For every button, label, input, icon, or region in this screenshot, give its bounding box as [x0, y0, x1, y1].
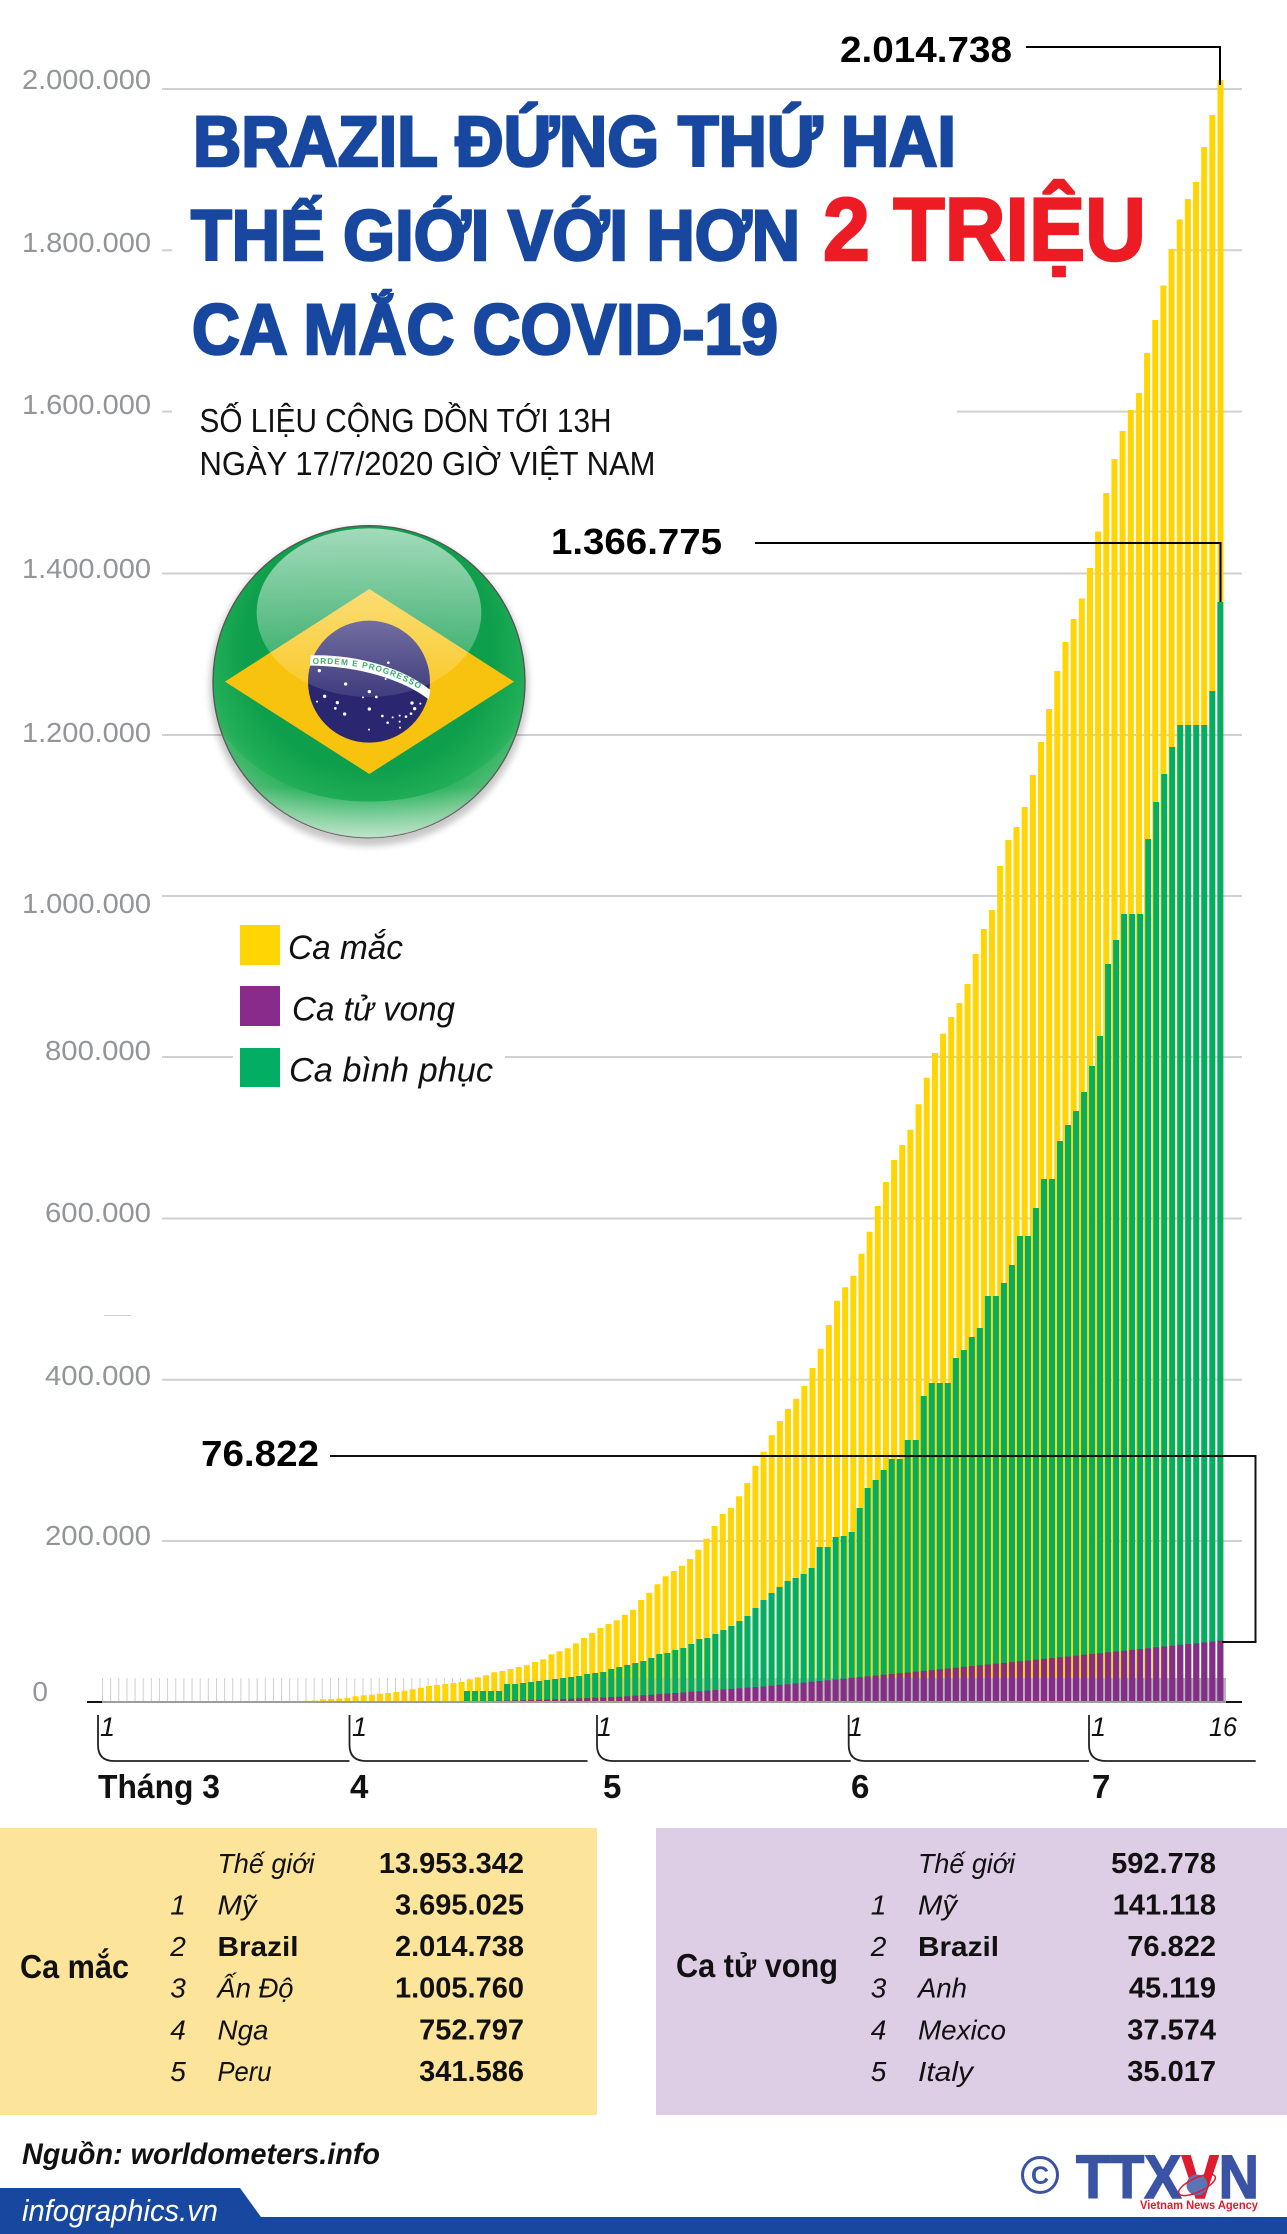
panel: ca tử vong ranking: 45.119: [1129, 1972, 1216, 2004]
panel: ca mắc ranking: Peru: [218, 2056, 272, 2087]
gridlines: [104, 89, 1242, 1541]
title: THẾ GIỚI VỚI HƠN: [191, 197, 800, 276]
callout: recovered: 1.366.775: [551, 521, 722, 562]
title: [191, 103, 1146, 370]
panel: ca mắc ranking: 3: [170, 1972, 186, 2004]
source: Nguồn: worldometers.info: [22, 2138, 380, 2171]
y-axis labels: 1.000.000: [22, 888, 151, 919]
panel: ca tử vong ranking: 5: [871, 2056, 887, 2087]
callout: deaths: 76.822: [201, 1433, 319, 1474]
y-axis labels: 1.800.000: [22, 227, 151, 258]
panel: ca mắc ranking: Nga: [218, 2014, 268, 2046]
legend: Ca bình phục: [289, 1052, 493, 1090]
panel: ca mắc ranking: 341.586: [419, 2056, 524, 2088]
y-axis labels: 800.000: [45, 1035, 151, 1066]
icon: copyright: [1022, 2158, 1058, 2192]
month brackets: 1: [597, 1712, 612, 1742]
panel: ca tử vong ranking: 592.778: [1111, 1848, 1216, 1880]
y-axis labels: 1.400.000: [22, 553, 151, 584]
panel: ca tử vong ranking: Mỹ: [918, 1890, 959, 1920]
callout: deaths: [201, 1433, 1256, 1642]
panel: ca tử vong ranking: [656, 1828, 1287, 2115]
y-axis labels: 200.000: [45, 1520, 151, 1551]
y-axis labels: [22, 64, 151, 1707]
panel: ca tử vong ranking: 1: [871, 1890, 886, 1920]
icon: Brazil flag globe: [206, 524, 532, 850]
icon: copyright: C: [1031, 2162, 1049, 2190]
month brackets: 5: [603, 1768, 621, 1805]
y-axis labels: 600.000: [45, 1197, 151, 1228]
callout: total cases: [840, 29, 1220, 85]
series: ca tử vong (purple): [464, 1641, 1223, 1702]
month brackets: Tháng 3: [98, 1768, 220, 1805]
panel: ca mắc ranking: 2: [169, 1931, 186, 1962]
month brackets: 1: [100, 1712, 115, 1742]
panel: ca mắc ranking: 4: [170, 2014, 186, 2046]
y-axis labels: 400.000: [45, 1360, 151, 1391]
footer band: [0, 2188, 1287, 2234]
y-axis labels: 1.600.000: [22, 389, 151, 420]
panel: ca mắc ranking: Mỹ: [218, 1890, 259, 1920]
panel: ca tử vong ranking: Italy: [918, 2056, 975, 2087]
panel: ca tử vong ranking: Mexico: [918, 2014, 1006, 2046]
panel: ca tử vong ranking: 141.118: [1113, 1890, 1216, 1922]
panel: ca mắc ranking: 752.797: [419, 2014, 524, 2046]
panel: ca tử vong ranking: Ca tử vong: [676, 1947, 838, 1984]
y-axis labels: 0: [32, 1676, 48, 1707]
month brackets: 1: [848, 1712, 863, 1742]
panel: ca tử vong ranking: 37.574: [1127, 2014, 1216, 2046]
callout: recovered: [551, 521, 1220, 602]
logo: TTXVN: Vietnam News Agency: [1140, 2198, 1258, 2212]
series: ca mắc (yellow): [263, 80, 1224, 1702]
panel: ca tử vong ranking: Thế giới: [918, 1848, 1016, 1879]
footer band: infographics.vn: [22, 2193, 218, 2228]
panel: ca mắc ranking: Ấn Độ: [216, 1972, 294, 2004]
legend: Ca tử vong: [292, 990, 455, 1028]
panel: ca tử vong ranking: 4: [871, 2014, 886, 2046]
month brackets: 16: [1209, 1712, 1238, 1742]
panel: ca tử vong ranking: 35.017: [1127, 2056, 1216, 2088]
title: CA MẮC COVID-19: [192, 290, 778, 370]
month brackets: 4: [350, 1768, 369, 1805]
bar chart: [87, 80, 1242, 1703]
callout: total cases: 2.014.738: [840, 29, 1012, 70]
panel: ca tử vong ranking: Anh: [916, 1972, 967, 2004]
panel: ca mắc ranking: Brazil: [218, 1931, 298, 1962]
y-axis labels: 1.200.000: [22, 717, 151, 748]
panel: ca mắc ranking: Ca mắc: [20, 1948, 129, 1985]
legend: [240, 925, 493, 1090]
panel: ca tử vong ranking: 2: [870, 1931, 887, 1962]
x-axis baseline: [87, 1701, 1242, 1703]
y-axis labels: 2.000.000: [22, 64, 151, 95]
panel: ca mắc ranking: Thế giới: [218, 1848, 315, 1879]
subtitle: [200, 401, 656, 482]
panel: ca tử vong ranking: Brazil: [918, 1931, 999, 1962]
month brackets: 1: [1091, 1712, 1106, 1742]
panel: ca tử vong ranking: 3: [871, 1972, 887, 2004]
title: 2 TRIỆU: [823, 179, 1146, 279]
series: ca bình phục (green): [464, 602, 1223, 1702]
legend: Ca mắc: [288, 929, 403, 967]
subtitle: NGÀY 17/7/2020 GIỜ VIỆT NAM: [200, 445, 656, 482]
panel: ca mắc ranking: [0, 1828, 597, 2115]
subtitle: SỐ LIỆU CỘNG DỒN TỚI 13H: [200, 401, 612, 439]
icon: Brazil flag globe: ORDEM E PROGRESSO: [312, 658, 421, 688]
panel: ca mắc ranking: 2.014.738: [395, 1931, 524, 1963]
month brackets: [98, 1712, 1256, 1805]
panel: ca mắc ranking: 1.005.760: [395, 1972, 524, 2004]
panel: ca mắc ranking: 3.695.025: [395, 1890, 524, 1922]
title: BRAZIL ĐỨNG THỨ HAI: [193, 103, 956, 182]
month brackets: 7: [1092, 1768, 1110, 1805]
panel: ca tử vong ranking: 76.822: [1127, 1931, 1216, 1963]
panel: ca mắc ranking: 13.953.342: [379, 1848, 524, 1880]
month brackets: 1: [352, 1712, 367, 1742]
panel: ca mắc ranking: 5: [170, 2056, 186, 2087]
month brackets: 6: [851, 1768, 869, 1805]
panel: ca mắc ranking: 1: [170, 1890, 186, 1920]
logo: TTXVN: TTXVN: [1076, 2143, 1259, 2211]
